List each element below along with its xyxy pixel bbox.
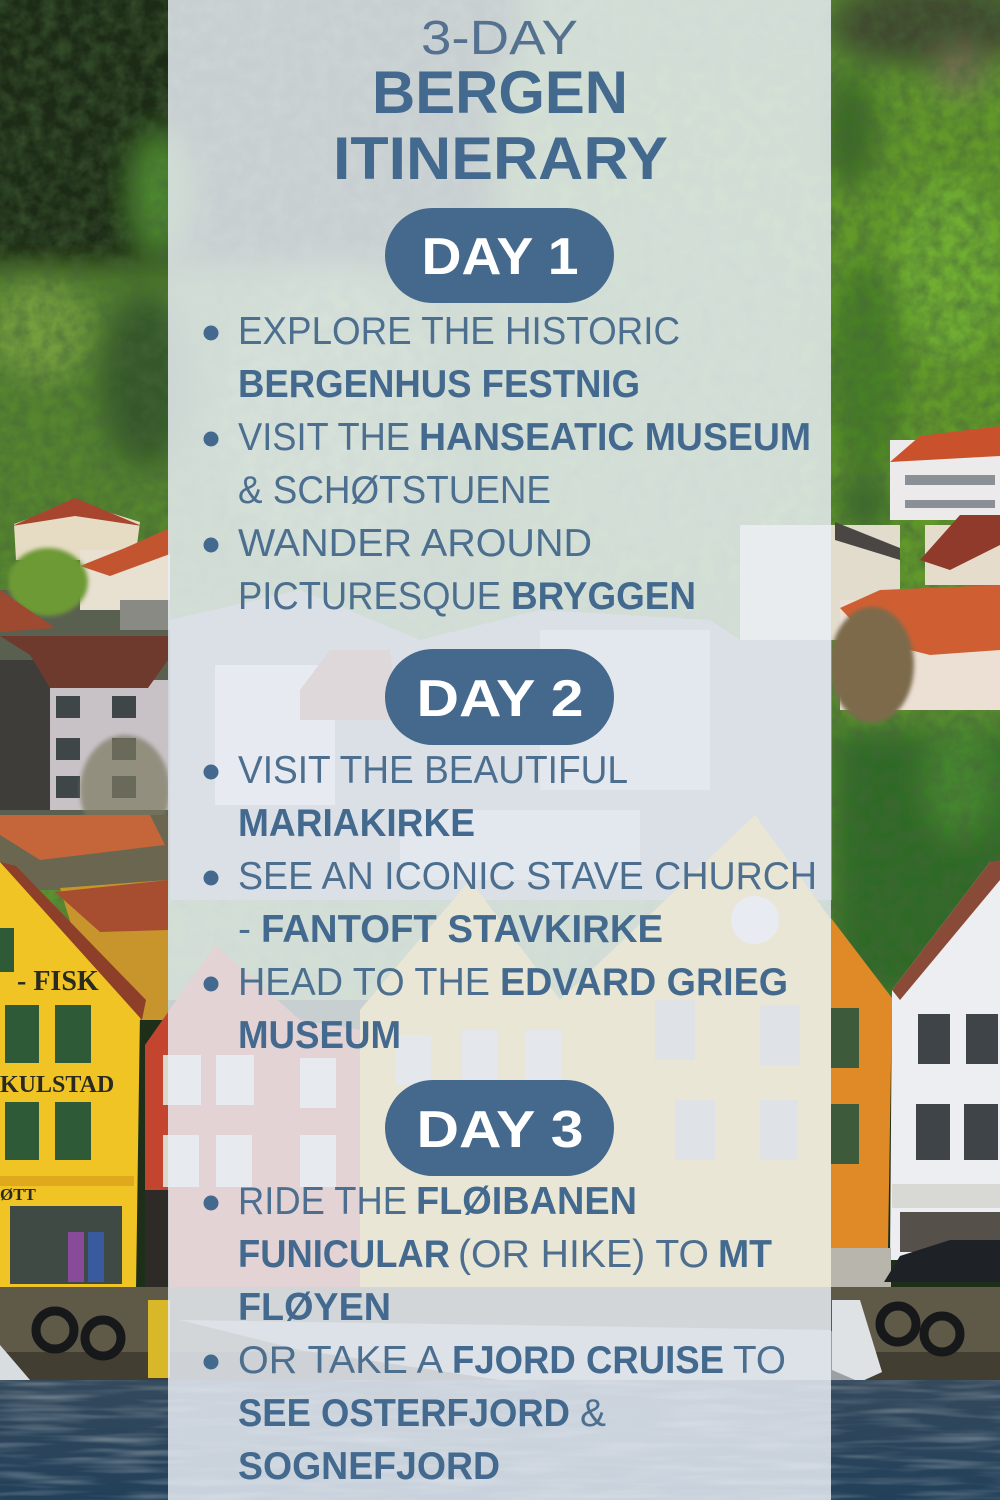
day 3 badge: DAY 3: [416, 1101, 584, 1159]
day 1 list: PICTURESQUE: [238, 575, 501, 618]
middle town behind panel: [170, 590, 832, 900]
shop signs: - FISK: [17, 966, 99, 997]
day 2 list: -: [238, 908, 251, 951]
red house: [145, 945, 360, 1290]
centre yellow house: [360, 815, 835, 1290]
day 1 list: HANSEATIC MUSEUM: [419, 416, 811, 459]
white house: [831, 860, 1000, 1288]
day 1 list: VISIT THE: [238, 416, 410, 459]
day 3 list: (OR HIKE) TO: [458, 1233, 709, 1276]
title line: ITINERARY: ITINERARY: [333, 125, 668, 192]
left houses: [0, 498, 170, 890]
day 3 badge: [385, 1080, 614, 1176]
yellow house: [0, 862, 146, 1290]
day 1 list: BRYGGEN: [511, 575, 696, 618]
day 3 list: TO: [733, 1339, 786, 1382]
day 3 list: SEE OSTERFJORD: [238, 1392, 570, 1435]
water: [0, 1380, 1000, 1500]
day 1 list: BERGENHUS FESTNIG: [238, 363, 640, 406]
title line: BERGEN: BERGEN: [372, 59, 628, 126]
day 3 list: [204, 1180, 786, 1488]
day 2 badge: [385, 649, 614, 745]
shop signs: [0, 966, 114, 1204]
day 3 list: FUNICULAR: [238, 1233, 450, 1276]
day 3 list: &: [580, 1392, 606, 1435]
day 2 list: VISIT THE BEAUTIFUL: [238, 749, 628, 792]
day 2 list: HEAD TO THE: [238, 961, 490, 1004]
day 1 badge: DAY 1: [422, 228, 578, 286]
hillside: [0, 0, 1000, 1000]
tiled roof: [55, 880, 168, 932]
quay: [0, 1287, 1000, 1382]
orange house: [831, 918, 892, 1250]
day 3 list: FJORD CRUISE: [452, 1339, 724, 1382]
day 1 list: [204, 310, 811, 618]
day 2 list: EDVARD GRIEG: [500, 961, 788, 1004]
day 1 list: WANDER AROUND: [238, 522, 592, 565]
day 2 list: MUSEUM: [238, 1014, 401, 1057]
day 1 list: & SCHØTSTUENE: [238, 469, 551, 512]
day 2 list: FANTOFT STAVKIRKE: [261, 908, 663, 951]
day 3 list: OR TAKE A: [238, 1339, 443, 1382]
translucent text panel: [168, 0, 831, 1500]
day 3 list: RIDE THE: [238, 1180, 407, 1223]
day 2 badge: DAY 2: [416, 670, 584, 728]
day 2 list: [204, 749, 817, 1057]
shop signs: KULSTAD: [0, 1072, 114, 1098]
day 1 badge: [385, 208, 614, 303]
shop signs: ØTT: [0, 1185, 37, 1204]
day 3 list: SOGNEFJORD: [238, 1445, 500, 1488]
day 1 list: EXPLORE THE HISTORIC: [238, 310, 680, 353]
day 2 list: SEE AN ICONIC STAVE CHURCH: [238, 855, 817, 898]
right houses: [740, 426, 1000, 723]
day 3 list: MT: [718, 1233, 772, 1276]
day 3 list: FLØYEN: [238, 1286, 391, 1329]
title: [333, 12, 668, 192]
day 3 list: FLØIBANEN: [416, 1180, 637, 1223]
ochre house behind yellow house: [60, 880, 168, 1020]
day 2 list: MARIAKIRKE: [238, 802, 475, 845]
title line: 3-DAY: 3-DAY: [421, 12, 578, 65]
